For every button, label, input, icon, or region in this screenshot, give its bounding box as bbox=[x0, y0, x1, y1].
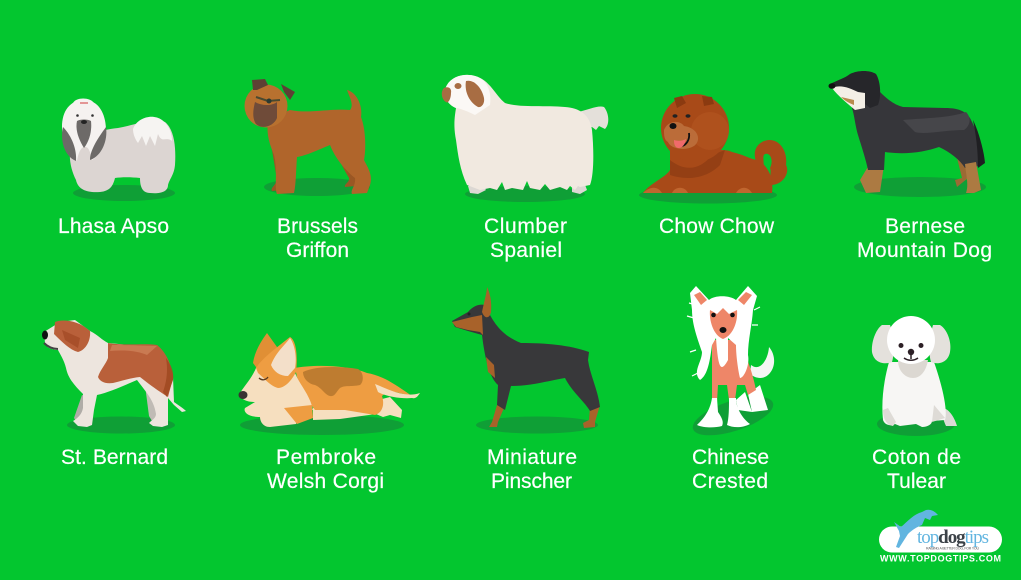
card: Lhasa Apso bbox=[58, 98, 175, 238]
icon: St. Bernard dog bbox=[42, 320, 186, 434]
card: Chow Chow bbox=[639, 94, 787, 238]
card: Bernese Mountain Dog bbox=[828, 71, 992, 262]
icon: Pembroke Welsh Corgi dog bbox=[238, 333, 420, 435]
icon: Brussels Griffon dog bbox=[244, 79, 371, 196]
label: Coton de Tulear: Coton de bbox=[872, 446, 961, 469]
label: Pembroke Welsh Corgi bbox=[267, 446, 384, 493]
label: St. Bernard: St. Bernard bbox=[61, 446, 168, 469]
label: Clumber Spaniel: Clumber bbox=[484, 215, 567, 238]
label: Chow Chow: Chow Chow bbox=[659, 215, 775, 238]
label: Pembroke Welsh Corgi: Pembroke bbox=[276, 446, 376, 469]
icon: Lhasa Apso dog bbox=[62, 98, 175, 201]
label: Clumber Spaniel: Spaniel bbox=[490, 239, 562, 262]
label: Chinese Crested bbox=[692, 446, 769, 493]
icon: Miniature Pinscher dog bbox=[452, 287, 600, 434]
label: Brussels Griffon: Brussels bbox=[277, 215, 358, 238]
card: Chinese Crested bbox=[687, 286, 778, 493]
logo wordmark: topdogtips bbox=[917, 527, 989, 548]
label: Coton de Tulear bbox=[872, 446, 961, 493]
label: Coton de Tulear: Tulear bbox=[887, 470, 946, 493]
icon: Bernese Mountain Dog bbox=[828, 71, 986, 197]
label: Brussels Griffon bbox=[277, 215, 358, 262]
card: Pembroke Welsh Corgi bbox=[238, 333, 420, 493]
label: Bernese Mountain Dog: Bernese bbox=[885, 215, 965, 238]
card: Coton de Tulear bbox=[872, 316, 961, 493]
label: Miniature Pinscher bbox=[487, 446, 577, 493]
card: Miniature Pinscher bbox=[452, 287, 600, 493]
website url: WWW.TOPDOGTIPS.COM bbox=[880, 554, 1001, 564]
logo tagline: RAISING A BETTER DOG, FOR YOU bbox=[926, 546, 979, 550]
label: Bernese Mountain Dog bbox=[857, 215, 992, 262]
label: Bernese Mountain Dog: Mountain Dog bbox=[857, 239, 992, 262]
icon: Clumber Spaniel dog bbox=[442, 75, 608, 202]
label: Chinese Crested: Chinese bbox=[692, 446, 769, 469]
logo: TopDogTips bbox=[879, 510, 1002, 564]
label: Miniature Pinscher: Miniature bbox=[487, 446, 577, 469]
label: Brussels Griffon: Griffon bbox=[286, 239, 349, 262]
label: Pembroke Welsh Corgi: Welsh Corgi bbox=[267, 470, 384, 493]
icon: Chow Chow dog bbox=[639, 94, 787, 204]
icon: Coton de Tulear dog bbox=[872, 316, 957, 436]
card: St. Bernard bbox=[42, 320, 186, 469]
card: Clumber Spaniel bbox=[442, 75, 608, 262]
icon: Chinese Crested dog bbox=[687, 286, 778, 443]
logo icon: leaping dog bbox=[894, 510, 938, 548]
label: Miniature Pinscher: Pinscher bbox=[491, 470, 572, 493]
card: Brussels Griffon bbox=[244, 79, 371, 262]
label: Chinese Crested: Crested bbox=[692, 470, 768, 493]
label: Lhasa Apso: Lhasa Apso bbox=[58, 215, 169, 238]
label: Clumber Spaniel bbox=[484, 215, 567, 262]
logo pill bbox=[879, 526, 1002, 552]
